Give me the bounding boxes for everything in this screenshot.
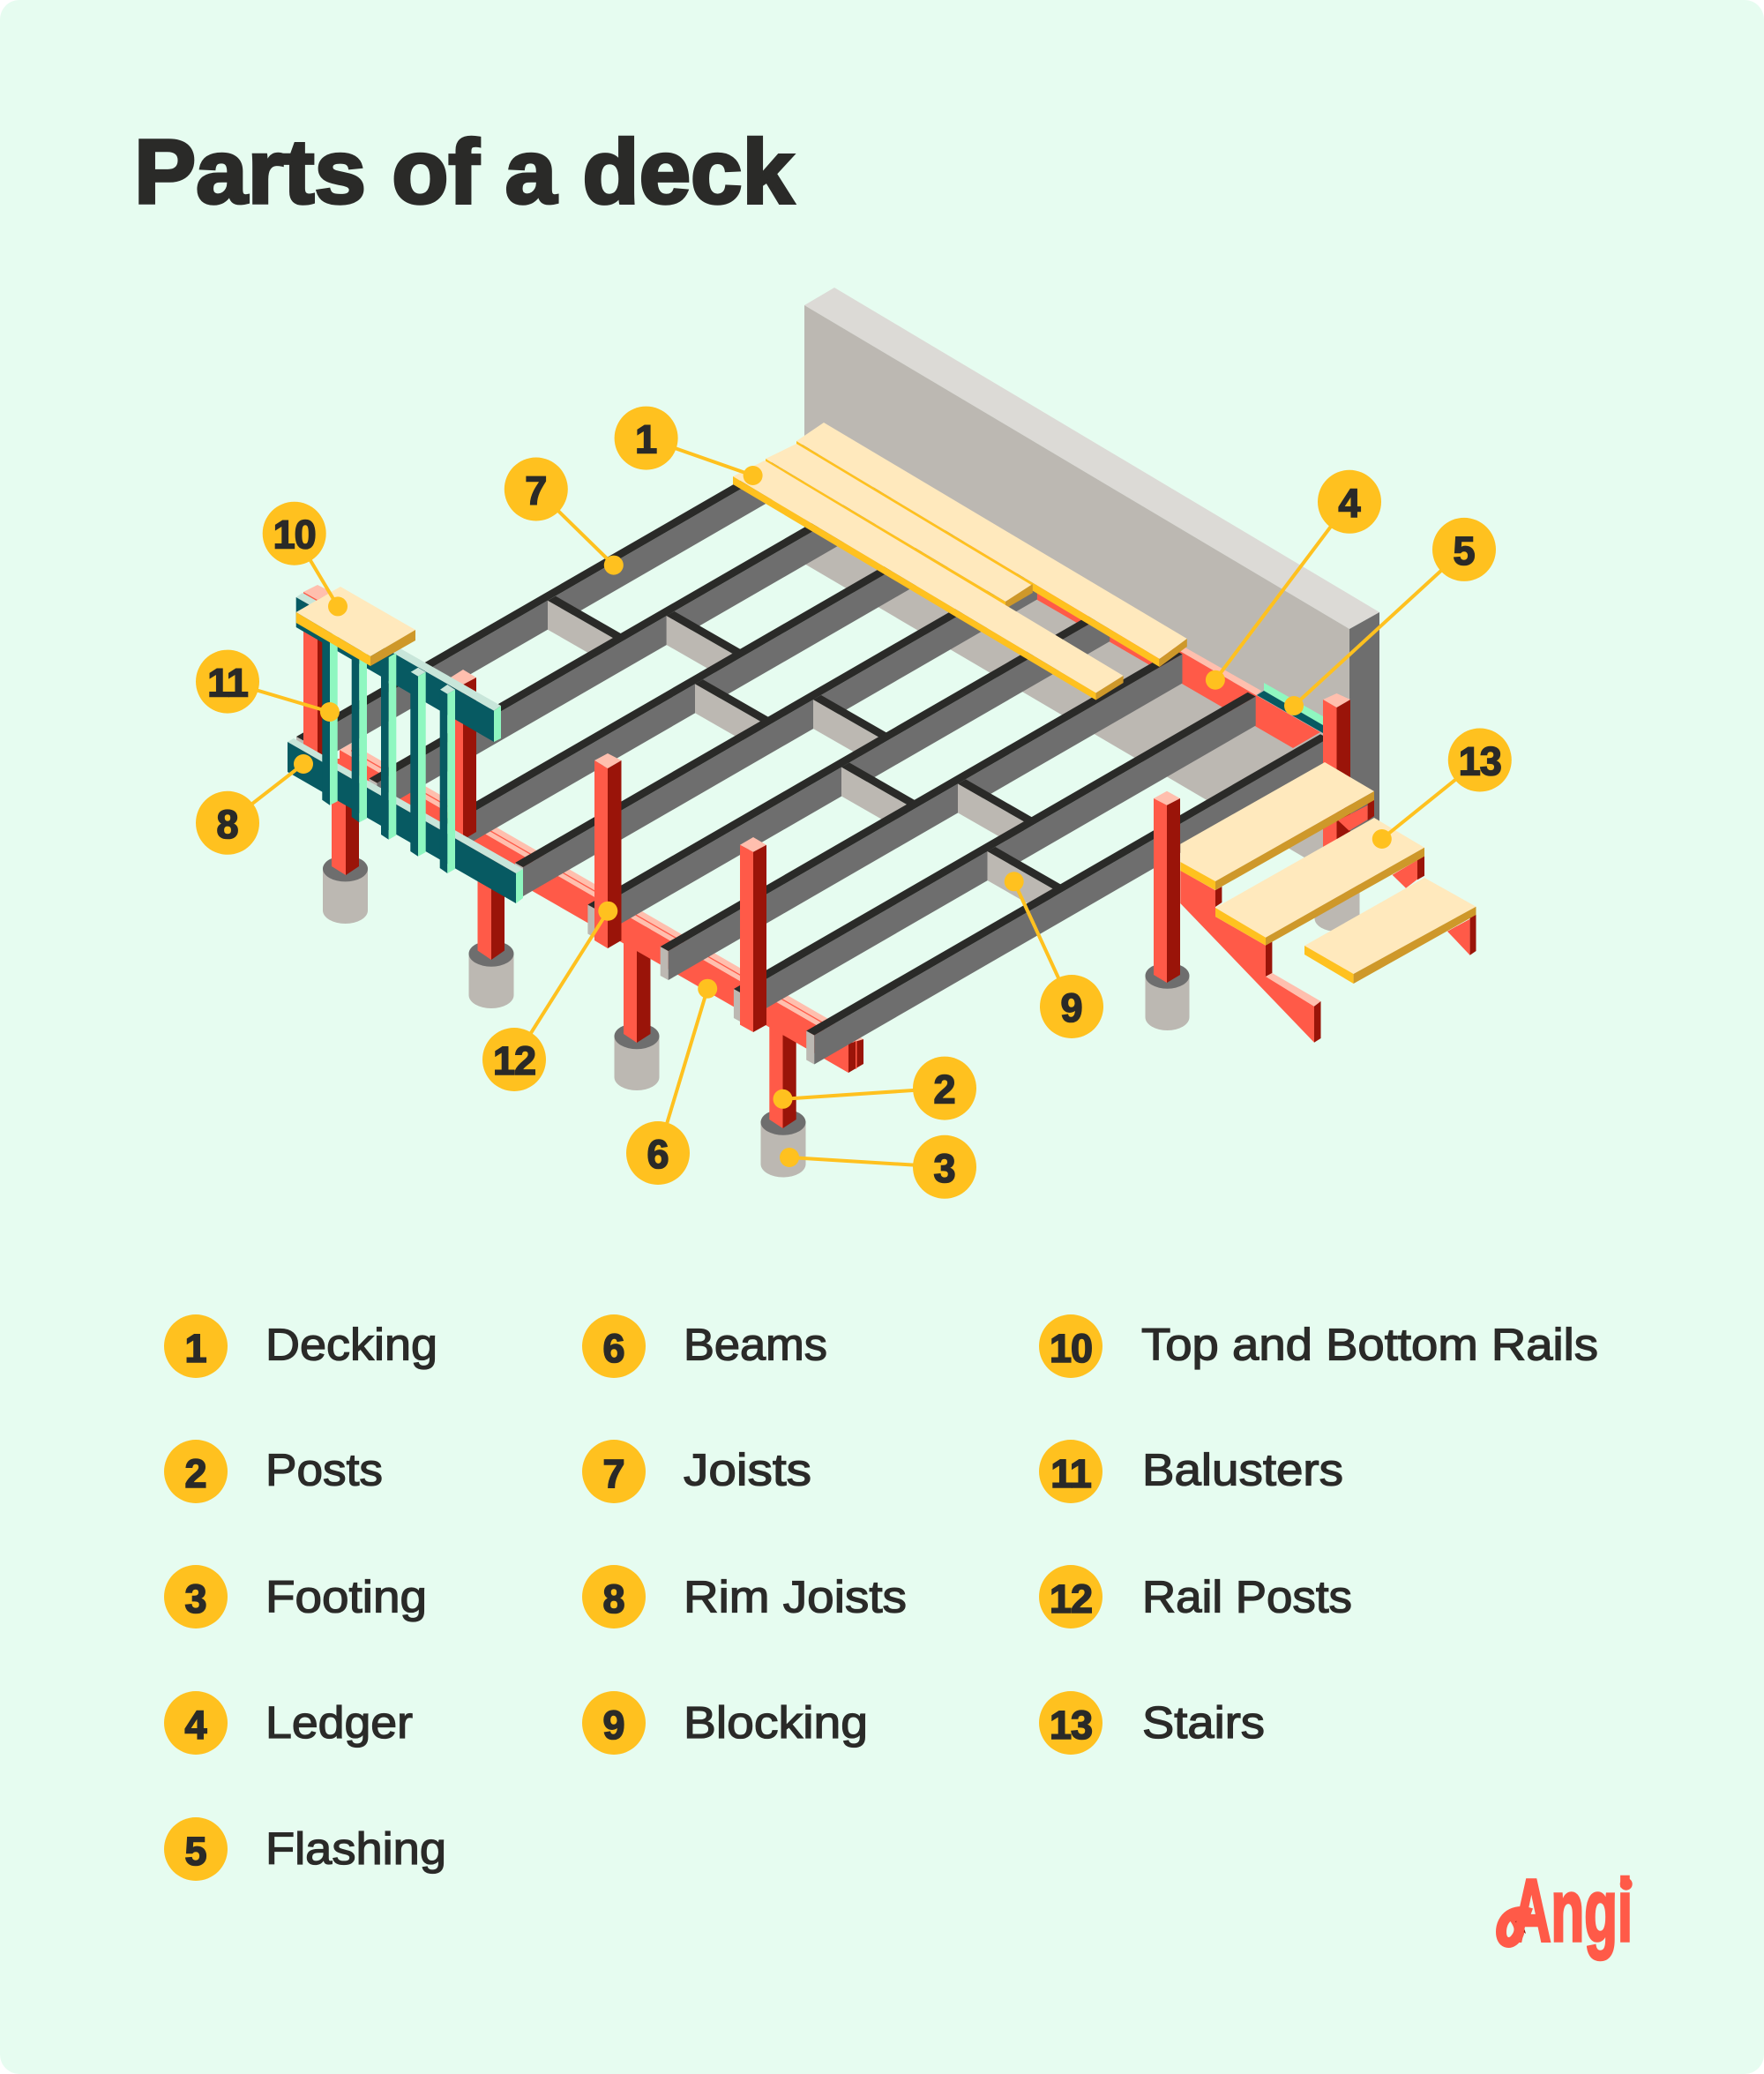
legend item 8: 8: [602, 1576, 625, 1621]
callout 13: 13: [1459, 739, 1501, 783]
callout 11: [196, 650, 340, 722]
joist row 3: [443, 524, 965, 854]
legend item 4: Ledger: [265, 1697, 413, 1748]
callout 5: [1284, 518, 1496, 715]
joist row 8: [806, 734, 1328, 1064]
legend item 5: [164, 1817, 446, 1881]
legend item 1: 1: [184, 1326, 207, 1371]
legend item 6: Beams: [684, 1320, 827, 1369]
top rail cap plank: [296, 587, 415, 666]
legend item 13: Stairs: [1142, 1697, 1265, 1748]
beam: [340, 744, 863, 1073]
joist row 4: [515, 566, 1037, 896]
callout 3: [780, 1135, 976, 1199]
rim joist bottom rail: [288, 738, 523, 903]
back stringer: [1337, 798, 1476, 955]
legend item 2: 2: [184, 1451, 207, 1496]
callout 8: 8: [216, 802, 239, 847]
Angi logo: Angi: [1512, 1861, 1633, 1960]
joists and blocking: [296, 440, 1328, 1064]
legend item 10: 10: [1050, 1326, 1092, 1371]
deck board back: [796, 423, 1187, 667]
callout 4: 4: [1338, 481, 1361, 526]
callout 10: 10: [273, 513, 316, 558]
legend item 6: [582, 1314, 827, 1378]
legend item 3: 3: [184, 1576, 207, 1621]
callout 6: 6: [647, 1132, 669, 1177]
callout 11: 11: [207, 661, 248, 706]
legend item 8: [582, 1565, 907, 1629]
callout 5: 5: [1453, 528, 1476, 573]
legend item 1: [164, 1314, 437, 1378]
Angi logo: [1501, 1861, 1633, 1960]
legend item 5: 5: [184, 1829, 207, 1874]
blocking 4: [813, 695, 887, 767]
balusters: [322, 631, 455, 873]
legend item 7: 7: [602, 1451, 625, 1496]
blocking 2: [667, 611, 741, 683]
legend item 13: [1039, 1691, 1265, 1755]
callout 9: 9: [1060, 985, 1083, 1030]
callout 12: [482, 902, 617, 1091]
legend item 12: [1039, 1565, 1352, 1629]
stairs: [1180, 762, 1476, 1043]
legend item 8: Rim Joists: [684, 1572, 907, 1621]
blocking 3: [695, 679, 769, 751]
joist row 1: [296, 440, 818, 770]
legend item 11: 11: [1050, 1451, 1091, 1496]
footings: [323, 856, 1360, 1178]
legend item 7: Joists: [684, 1445, 811, 1494]
legend item 9: 9: [602, 1703, 625, 1748]
legend item 11: Balusters: [1142, 1445, 1343, 1494]
blocking 7: [988, 847, 1062, 918]
deck illustration: [288, 288, 1476, 1178]
legend item 5: Flashing: [265, 1823, 446, 1874]
callout 12: 12: [493, 1038, 535, 1083]
joist row 7: [734, 693, 1256, 1022]
front stringer: [1180, 871, 1321, 1043]
legend item 9: [582, 1691, 868, 1755]
blocking 5: [841, 762, 916, 835]
callout 2: [773, 1057, 976, 1120]
callout 2: 2: [933, 1067, 956, 1112]
decking boards: [733, 423, 1187, 700]
legend item 6: 6: [602, 1326, 625, 1371]
legend item 4: [164, 1691, 413, 1755]
callout 8: [196, 754, 313, 855]
callout 7: [505, 457, 624, 575]
flashing: [1257, 683, 1323, 733]
callout 6: [626, 979, 717, 1185]
deck board middle: [766, 444, 1033, 609]
blocking 6: [958, 779, 1032, 850]
support posts: [332, 759, 796, 1128]
rail posts: [303, 585, 1350, 1032]
legend item 7: [582, 1440, 811, 1503]
callout 3: 3: [933, 1146, 956, 1191]
callout 7: 7: [525, 468, 547, 513]
legend: [164, 1314, 1598, 1881]
top rail: [296, 593, 501, 742]
callout 13: [1372, 729, 1512, 849]
legend item 11: [1039, 1440, 1343, 1503]
joist row 6: [661, 650, 1182, 980]
deck board front: [733, 460, 1124, 700]
joist row 2: [369, 482, 891, 812]
legend item 2: Posts: [265, 1445, 383, 1494]
callout 9: [1005, 872, 1103, 1038]
callout 10: [263, 502, 348, 616]
callout 4: [1206, 470, 1381, 690]
joist row 5: [587, 608, 1110, 939]
legend item 2: [164, 1440, 383, 1503]
legend item 10: [1039, 1314, 1598, 1378]
tread bottom: [1304, 878, 1476, 984]
callout 1: 1: [635, 417, 657, 462]
house wall: [804, 288, 1379, 884]
legend item 12: Rail Posts: [1142, 1572, 1352, 1621]
legend item 3: [164, 1565, 427, 1629]
callout 1: [615, 407, 763, 485]
title: Parts of a deck: [134, 121, 795, 222]
legend item 3: Footing: [265, 1572, 427, 1621]
legend item 13: 13: [1050, 1703, 1092, 1748]
tread middle: [1215, 818, 1424, 946]
legend item 10: Top and Bottom Rails: [1141, 1320, 1598, 1369]
blocking 1: [548, 596, 622, 668]
legend item 4: 4: [184, 1703, 207, 1748]
legend item 1: Decking: [265, 1320, 437, 1369]
legend item 12: 12: [1050, 1576, 1092, 1621]
legend item 9: Blocking: [684, 1697, 868, 1748]
ledger: [970, 521, 1320, 748]
tread top: [1180, 762, 1374, 890]
